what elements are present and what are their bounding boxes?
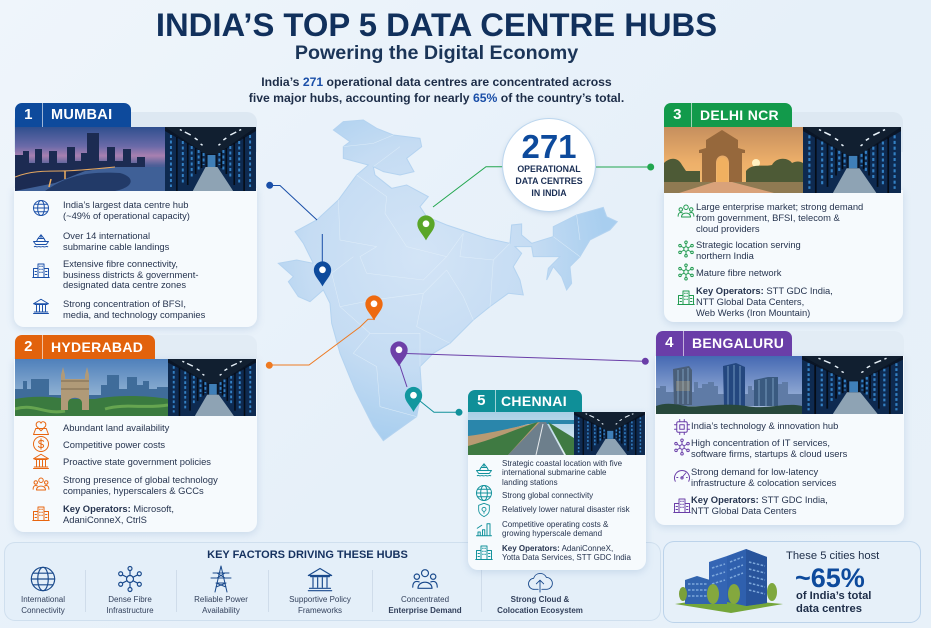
text: strategic location: northern India (696, 250, 754, 260)
text: coastal location: Strategic coastal location with five (502, 459, 622, 468)
connector: chennai (420, 401, 462, 415)
text: these 5 cities host: These 5 cities host (786, 550, 879, 562)
tab: 5 chennai: 5 (477, 392, 486, 409)
text: global presence: Strong presence of global technology (63, 474, 218, 484)
text: strategic location: Strategic location serving (696, 238, 801, 250)
text: fibre connectivity (63, 258, 198, 290)
stat circle: 271 operational data centres: 271 (521, 128, 577, 165)
text: enterprise market (696, 200, 863, 234)
icon: dollar (33, 436, 49, 452)
panel: bengaluru (652, 331, 906, 530)
title: INDIA’S TOP 5 DATA CENTRE HUBS (156, 6, 717, 43)
text: coastal location (502, 459, 622, 487)
label: cloud ecosystem: Strong Cloud & (511, 595, 569, 604)
intro text: India’s 271 operational data centres are concentrated across (261, 75, 612, 89)
text: key operators: Web Werks (Iron Mountain) (696, 306, 810, 318)
text: key operators: Key Operators: AdaniConneX, (502, 544, 613, 553)
icon: bars (475, 520, 493, 538)
icon: chip (674, 419, 690, 435)
tab: 3 delhi ncr: 3 (673, 106, 682, 123)
icon: cloud (526, 571, 554, 593)
label: reliable power: Reliable Power (194, 595, 248, 604)
text: power costs: Competitive power costs (63, 438, 165, 450)
text: low latency: Strong demand for low-latency (691, 466, 818, 476)
text: operating costs: growing hyperscale demand (502, 529, 602, 538)
text: key operators: NTT Global Data Centers (691, 504, 797, 516)
map: india outline (278, 120, 617, 441)
text: policies: Proactive state government policies (63, 456, 211, 466)
text: fibre connectivity: Extensive fibre connectivity, (63, 258, 178, 269)
panel: key factors (5, 543, 660, 620)
text: cable landings: submarine cable landings (63, 240, 169, 252)
panel: chennai (468, 390, 646, 570)
photo: charminar and server hall (15, 359, 256, 416)
number: about 65 percent: ~65% (795, 563, 865, 593)
subtitle: Powering the Digital Economy (295, 42, 578, 64)
label: reliable power (176, 594, 266, 616)
connector: delhi (433, 164, 654, 207)
tab: 2 hyderabad: HYDERABAD (51, 339, 143, 355)
text: largest hub (63, 198, 190, 221)
photo: india gate and server hall (664, 127, 901, 193)
text: low latency: infrastructure & colocation services (691, 476, 836, 488)
tab: 4 bengaluru: BENGALURU (692, 335, 784, 351)
text: innovation hub: India’s technology & innovation hub (691, 420, 838, 430)
label: supportive policy: Supportive Policy (289, 595, 351, 604)
text: key operators (691, 494, 828, 516)
text: mature fibre: Mature fibre network (696, 266, 781, 278)
intro text (248, 75, 624, 105)
connector: hyderabad (266, 319, 375, 368)
tab: 1 mumbai (15, 103, 131, 127)
tab: 5 chennai (468, 390, 582, 412)
text: key operators: Yotta Data Services, STT GDC India (502, 553, 631, 562)
label: reliable power: Availability (202, 606, 240, 615)
icon: network (674, 438, 690, 456)
label: cloud ecosystem (495, 594, 585, 616)
icon: submarine cable (475, 460, 493, 478)
label: supportive policy (275, 594, 365, 616)
icon: enterprise demand (411, 565, 439, 593)
label: enterprise demand: Concentrated (401, 595, 449, 604)
text: key operators (502, 544, 631, 563)
text: it services: High concentration of IT services, (691, 436, 830, 448)
icon: building (475, 543, 493, 561)
text: bfsi concentration (63, 298, 205, 320)
text: largest hub: India’s largest data centre hub (63, 198, 188, 210)
stat circle: 271 operational data centres (503, 119, 595, 211)
text: enterprise market: cloud providers (696, 222, 760, 234)
text: key operators: Key Operators: STT GDC India, (696, 284, 833, 296)
icon: building (32, 264, 50, 278)
tab: 4 bengaluru (656, 331, 792, 356)
pin: hyderabad (365, 295, 383, 320)
stat circle: 271 operational data centres: DATA CENTRES (515, 176, 583, 186)
icon: submarine cable (33, 234, 49, 248)
text: of india's total data centres: data centres (796, 602, 862, 614)
tab: 3 delhi ncr: DELHI NCR (700, 107, 779, 123)
text: it services: software firms, startups & cloud users (691, 448, 847, 458)
tab: 1 mumbai: MUMBAI (51, 107, 112, 123)
label: international connectivity: International (21, 595, 65, 604)
text: key operators (696, 284, 833, 318)
text: enterprise market: from government, BFSI, telecom & (696, 212, 840, 222)
icon: power tower (207, 565, 235, 593)
text: of india's total data centres (796, 590, 871, 615)
text: operating costs: Competitive operating costs & (502, 520, 608, 529)
heading: key factors: KEY FACTORS DRIVING THESE HUBS (207, 549, 408, 561)
icon: globe (33, 200, 49, 216)
connector: bengaluru (399, 354, 648, 387)
photo: mumbai skyline and server hall (15, 127, 256, 191)
icon: globe (475, 484, 493, 502)
pin: chennai (405, 387, 422, 412)
icon: bank (33, 454, 49, 469)
text: global presence (63, 474, 218, 496)
text: bfsi concentration: media, and technology companies (63, 308, 205, 320)
icon: bank (33, 298, 49, 314)
icon: shield (476, 502, 492, 518)
text: global presence: companies, hyperscalers & GCCs (63, 484, 204, 496)
text: cable landings (63, 230, 169, 252)
text: global connectivity: Strong global connectivity (502, 491, 593, 500)
photo: chennai coast and server hall (468, 412, 645, 455)
label: enterprise demand (380, 594, 470, 616)
text: largest hub: (~49% of operational capacity) (63, 210, 190, 220)
text: key operators (63, 502, 174, 524)
pin: bengaluru (390, 341, 408, 366)
pin: mumbai (314, 261, 331, 286)
stat circle: 271 operational data centres: IN INDIA (531, 188, 567, 198)
text: strategic location (696, 238, 801, 260)
icon: gauge (674, 470, 690, 482)
tab: 4 bengaluru: 4 (665, 334, 674, 351)
label: dense fibre (85, 594, 175, 616)
text: low latency (691, 466, 836, 488)
tab: 5 chennai: CHENNAI (501, 393, 567, 409)
icon: land (33, 421, 49, 435)
pin: delhi (417, 215, 435, 240)
text: fibre connectivity: business districts & government- (63, 268, 198, 280)
label: enterprise demand: Enterprise Demand (388, 606, 462, 615)
icon: building (32, 506, 50, 521)
connector: mumbai (267, 182, 322, 264)
photo: bengaluru towers and server hall (656, 356, 903, 414)
panel: mumbai (11, 103, 260, 332)
label: international connectivity: Connectivity (21, 606, 65, 615)
icon: fibre (678, 264, 694, 280)
text: land availability: Abundant land availability (63, 422, 169, 432)
intro text: five major hubs, accounting for nearly 65% of the country’s total. (249, 91, 624, 105)
text: key operators: AdaniConneX, CtrlS (63, 514, 147, 524)
text: it services (691, 436, 847, 459)
illustration: data centre buildings (675, 548, 785, 618)
icon: policy (306, 565, 334, 593)
tab: 3 delhi ncr (664, 103, 792, 127)
text: key operators: NTT Global Data Centers, (696, 296, 804, 306)
tab: 2 hyderabad: 2 (24, 338, 33, 355)
icon: dense fibre (116, 565, 144, 593)
text: operating costs (502, 520, 608, 539)
icon: building (673, 498, 691, 513)
label: dense fibre: Infrastructure (106, 606, 154, 615)
label: dense fibre: Dense Fibre (108, 595, 152, 604)
icon: international connectivity (30, 566, 56, 592)
text: disaster risk: Relatively lower natural disaster risk (502, 505, 630, 514)
icon: people (678, 204, 694, 218)
tab: 2 hyderabad (15, 335, 155, 359)
text: enterprise market: Large enterprise market; strong demand (696, 200, 863, 212)
text: cable landings: Over 14 international (63, 230, 150, 240)
text: coastal location: landing stations (502, 478, 558, 487)
label: cloud ecosystem: Colocation Ecosystem (497, 606, 583, 615)
label: international connectivity (21, 595, 65, 615)
text: fibre connectivity: designated data centre zones (63, 279, 186, 290)
text: key operators: Key Operators: Microsoft, (63, 502, 174, 514)
panel: hyderabad (12, 335, 260, 536)
stat circle: 271 operational data centres: OPERATIONAL (517, 164, 581, 174)
panel: 65 percent stat (664, 542, 920, 622)
text: coastal location: international submarine cable (502, 468, 607, 477)
tab: 1 mumbai: 1 (24, 106, 33, 123)
icon: building (677, 290, 695, 305)
panel: delhi ncr (662, 103, 906, 326)
icon: people (32, 478, 50, 490)
text: key operators: Key Operators: STT GDC India, (691, 494, 828, 504)
text: bfsi concentration: Strong concentration of BFSI, (63, 298, 186, 308)
text: of india's total data centres: of India’s total (796, 590, 871, 602)
icon: network (678, 240, 694, 258)
label: supportive policy: Frameworks (298, 606, 342, 615)
